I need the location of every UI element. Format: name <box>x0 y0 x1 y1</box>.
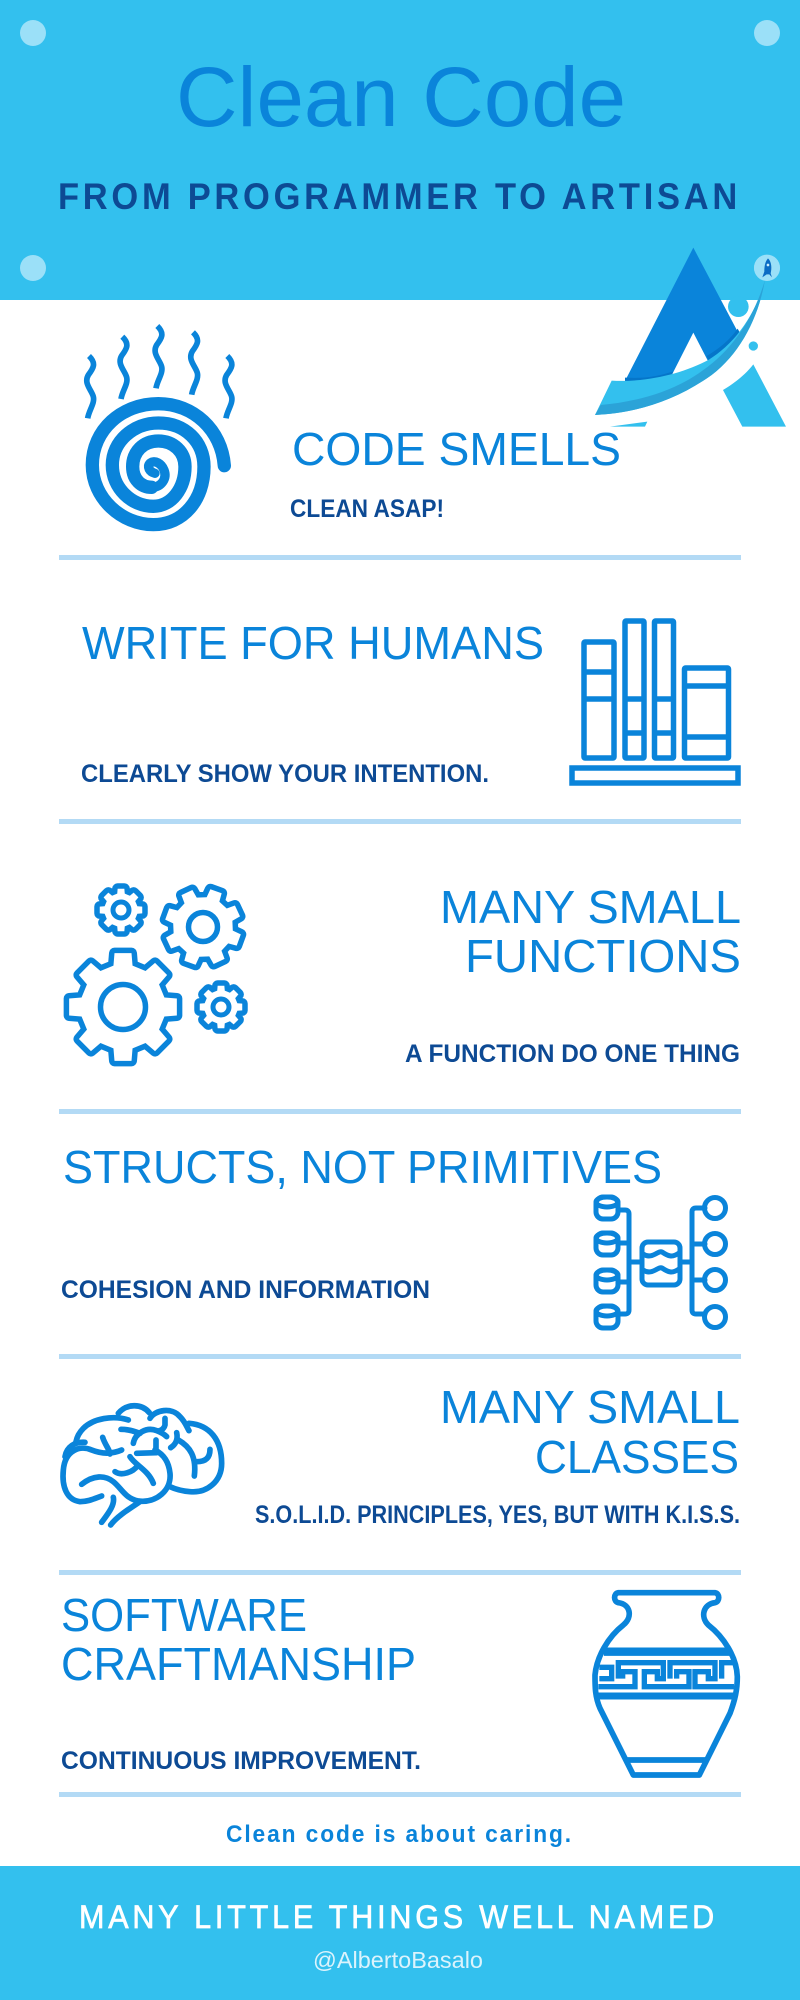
heading: MANY SMALL <box>440 881 741 933</box>
icon: data structure diagram <box>596 1197 726 1328</box>
logo: rocket A <box>595 248 786 427</box>
subheading: CONTINUOUS IMPROVEMENT. <box>61 1747 421 1775</box>
panel: code smells <box>87 326 621 525</box>
subtitle: FROM PROGRAMMER TO ARTISAN <box>58 176 741 217</box>
heading: CODE SMELLS <box>292 423 621 475</box>
icon: greek vase <box>595 1593 737 1775</box>
heading <box>440 1381 740 1483</box>
panel: write for humans <box>81 617 738 788</box>
heading: STRUCTS, NOT PRIMITIVES <box>63 1141 662 1193</box>
closing remark: Clean code is about caring. <box>226 1821 573 1848</box>
heading: MANY SMALL <box>440 1381 740 1433</box>
footer tagline: MANY LITTLE THINGS WELL NAMED <box>79 1899 718 1935</box>
title: Clean Code <box>176 50 626 144</box>
icon: brain <box>63 1406 222 1525</box>
panel: structs, not primitives <box>61 1141 726 1328</box>
heading <box>61 1589 416 1690</box>
footer handle: @AlbertoBasalo <box>313 1947 483 1973</box>
header banner <box>0 0 800 300</box>
footer banner <box>0 1866 800 2000</box>
subheading: CLEARLY SHOW YOUR INTENTION. <box>81 760 489 788</box>
heading: WRITE FOR HUMANS <box>82 617 544 669</box>
panel: many small functions <box>69 878 741 1068</box>
panel: many small classes <box>63 1381 740 1529</box>
icon: books <box>572 621 738 783</box>
heading: FUNCTIONS <box>465 930 741 982</box>
icon: smelly spiral <box>87 326 232 525</box>
panel: software craftsmanship <box>61 1589 737 1775</box>
subheading: CLEAN ASAP! <box>290 495 444 523</box>
heading: CRAFTMANSHIP <box>61 1638 416 1690</box>
heading: SOFTWARE <box>61 1589 307 1641</box>
icon: gears <box>69 878 252 1061</box>
subheading: COHESION AND INFORMATION <box>61 1276 430 1304</box>
heading: CLASSES <box>535 1431 739 1483</box>
heading <box>440 881 741 982</box>
subheading: S.O.L.I.D. PRINCIPLES, YES, BUT WITH K.I.S.S. <box>255 1501 740 1529</box>
subheading: A FUNCTION DO ONE THING <box>405 1040 740 1068</box>
